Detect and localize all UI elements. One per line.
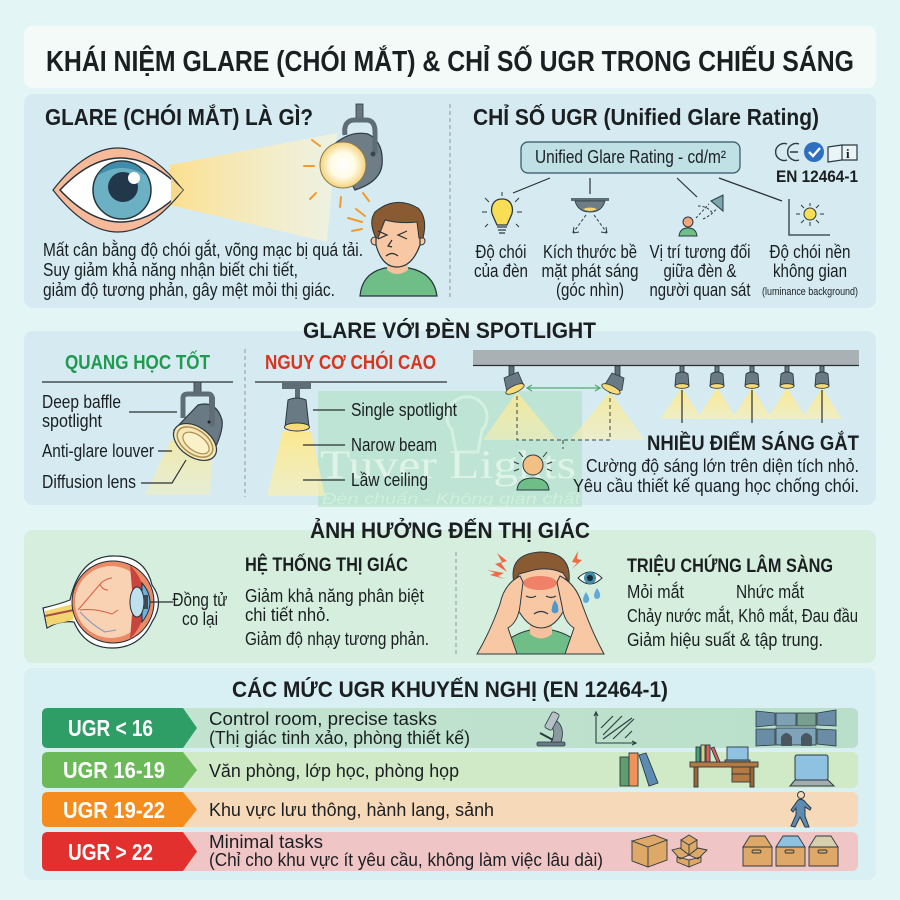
row of five pendant lights — [660, 366, 842, 423]
labels: high risk callouts: Narow beam — [351, 435, 437, 455]
text: visual system — [245, 552, 429, 649]
watermark: Đèn chuẩn - Không gian chất — [322, 490, 581, 508]
row: UGR 19-22: UGR 19-22 — [63, 797, 165, 823]
icon: storage bins — [743, 836, 838, 866]
label: pupil constriction: Đồng tử — [172, 590, 228, 610]
icon: laptop — [790, 755, 834, 786]
row: UGR 16-19: Văn phòng, lớp học, phòng họp — [209, 760, 459, 781]
heading: what is glare: GLARE (CHÓI MẮT) LÀ GÌ? — [45, 103, 313, 130]
icon: single spotlight — [267, 382, 325, 496]
panel: glare and UGR definition — [24, 94, 876, 308]
icon: background luminance — [789, 199, 830, 235]
text: clinical symptoms: TRIỆU CHỨNG LÂM SÀNG — [627, 553, 833, 577]
ceiling bar — [473, 350, 859, 366]
text: glare description: Mất cân bằng độ chói gắt, võng mạc bị quá tải. — [43, 239, 363, 260]
row: UGR above 22 — [42, 831, 858, 871]
text: many glare points: Cường độ sáng lớn trên diện tích nhỏ. — [586, 456, 859, 476]
UGR factor labels: (luminance background) — [762, 286, 858, 298]
heading: good optics: QUANG HỌC TỐT — [65, 350, 210, 374]
text: clinical symptoms — [627, 553, 858, 650]
text: clinical symptoms: Chảy nước mắt, Khô mắt, Đau đầu — [627, 605, 858, 626]
row: UGR above 22: Minimal tasks — [209, 831, 323, 852]
icon: chart with diagonal lines — [594, 712, 636, 745]
row: UGR above 22: UGR > 22 — [68, 839, 153, 865]
UGR factor labels: Độ chói — [476, 242, 526, 262]
text: clinical symptoms: Mỏi mắt — [627, 581, 684, 602]
text: visual system: chi tiết nhỏ. — [245, 605, 330, 625]
icon: cardboard boxes — [632, 835, 707, 867]
two spaced spotlights with beams — [483, 366, 645, 449]
row: UGR 19-22 — [42, 792, 858, 827]
certification badges: i — [846, 146, 850, 161]
row: UGR below 16: UGR < 16 — [68, 715, 153, 741]
text: clinical symptoms: Giảm hiệu suất & tập trung. — [627, 630, 823, 650]
icon: observer — [514, 452, 552, 490]
text: visual system: Giảm khả năng phân biệt — [245, 586, 424, 606]
labels: good optics callouts — [42, 392, 186, 492]
row: UGR below 16: Control room, precise tasks — [209, 708, 437, 729]
heading: ẢNH HƯỞNG ĐẾN THỊ GIÁC — [310, 518, 590, 543]
icon: glaring spotlight — [304, 104, 382, 231]
heading: UGR: CHỈ SỐ UGR (Unified Glare Rating) — [473, 102, 819, 130]
labels: high risk callouts: Lầw ceiling — [351, 470, 428, 490]
row: UGR above 22: (Chỉ cho khu vực ít yêu cầu, không làm việc lâu dài) — [209, 849, 603, 870]
panel: UGR recommended levels — [24, 668, 876, 880]
icon: control room — [756, 710, 836, 746]
text: clinical symptoms: Nhức mắt — [736, 581, 804, 602]
UGR factor labels: giữa đèn & — [664, 261, 736, 281]
icon: books — [620, 753, 658, 786]
labels: good optics callouts: spotlight — [42, 411, 102, 431]
icon: ceiling light surface — [571, 198, 609, 233]
icon: person with headache — [477, 552, 604, 654]
icon: desk with books and laptop — [690, 745, 758, 787]
label: pupil constriction: co lại — [182, 609, 218, 629]
row: UGR 16-19 — [42, 745, 858, 788]
icon: relative position — [679, 195, 723, 236]
watermark — [318, 391, 582, 508]
labels: good optics callouts: Deep baffle — [42, 392, 121, 412]
text: glare description: Suy giảm khả năng nhận biết chi tiết, — [43, 260, 298, 280]
certification badges — [776, 142, 858, 186]
UGR factor labels: Kích thước bề — [543, 242, 637, 262]
heading: high glare risk: NGUY CƠ CHÓI CAO — [265, 350, 436, 374]
icon: bulb — [482, 192, 522, 233]
labels: high risk callouts: Single spotlight — [351, 400, 457, 420]
light beam into eye — [170, 133, 337, 242]
UGR factor labels — [474, 242, 858, 300]
UGR factor labels: của đèn — [474, 261, 528, 281]
labels: good optics callouts: Diffusion lens — [42, 472, 136, 492]
UGR factor labels: Vị trí tương đối — [650, 242, 750, 262]
row: UGR 16-19: UGR 16-19 — [63, 757, 165, 783]
icon: squinting person — [360, 202, 437, 296]
icon: eye anatomy — [43, 556, 158, 648]
UGR factor labels: Độ chói nền — [770, 242, 850, 262]
text: many glare points: Yêu cầu thiết kế quang học chống chói. — [573, 476, 859, 496]
icon: eye — [53, 148, 183, 232]
formula box — [521, 142, 740, 173]
text: glare description: giảm độ tương phản, gây mệt mỏi thị giác. — [43, 280, 335, 300]
text: glare description — [43, 239, 363, 300]
certification badges: EN 12464-1 — [776, 168, 858, 186]
labels: high risk callouts — [303, 400, 457, 490]
title — [24, 26, 876, 88]
UGR factor labels: mặt phát sáng — [542, 261, 638, 281]
heading: CÁC MỨC UGR KHUYẾN NGHỊ (EN 12464-1) — [232, 677, 668, 702]
icon: stress bolts, eye and tears — [487, 551, 602, 603]
UGR factor labels: (góc nhìn) — [556, 280, 624, 300]
icon: walking person — [791, 792, 811, 827]
row: UGR 19-22: Khu vực lưu thông, hành lang, sảnh — [209, 799, 494, 820]
label: pupil constriction — [150, 590, 228, 629]
beam good — [145, 440, 212, 495]
panel: visual impact — [24, 518, 876, 663]
icon: baffle spotlight — [167, 382, 223, 468]
text: many glare points: NHIỀU ĐIỂM SÁNG GẮT — [647, 430, 859, 455]
icon: microscope — [537, 711, 565, 746]
connector lines — [513, 178, 782, 201]
formula box: Unified Glare Rating - cd/m² — [535, 147, 726, 167]
row: UGR below 16 — [42, 708, 858, 748]
labels: good optics callouts: Anti-glare louver — [42, 441, 154, 461]
row: UGR below 16: (Thị giác tinh xảo, phòng thiết kế) — [209, 727, 470, 748]
watermark: Tuver Lights — [320, 442, 576, 487]
UGR factor labels: người quan sát — [650, 280, 750, 300]
text: many glare points — [573, 430, 859, 496]
heading: GLARE VỚI ĐÈN SPOTLIGHT — [303, 318, 596, 343]
text: visual system: HỆ THỐNG THỊ GIÁC — [245, 552, 408, 576]
UGR factor labels: không gian — [773, 261, 847, 281]
panel: glare with spotlights — [24, 318, 876, 508]
text: visual system: Giảm độ nhạy tương phản. — [245, 629, 429, 649]
